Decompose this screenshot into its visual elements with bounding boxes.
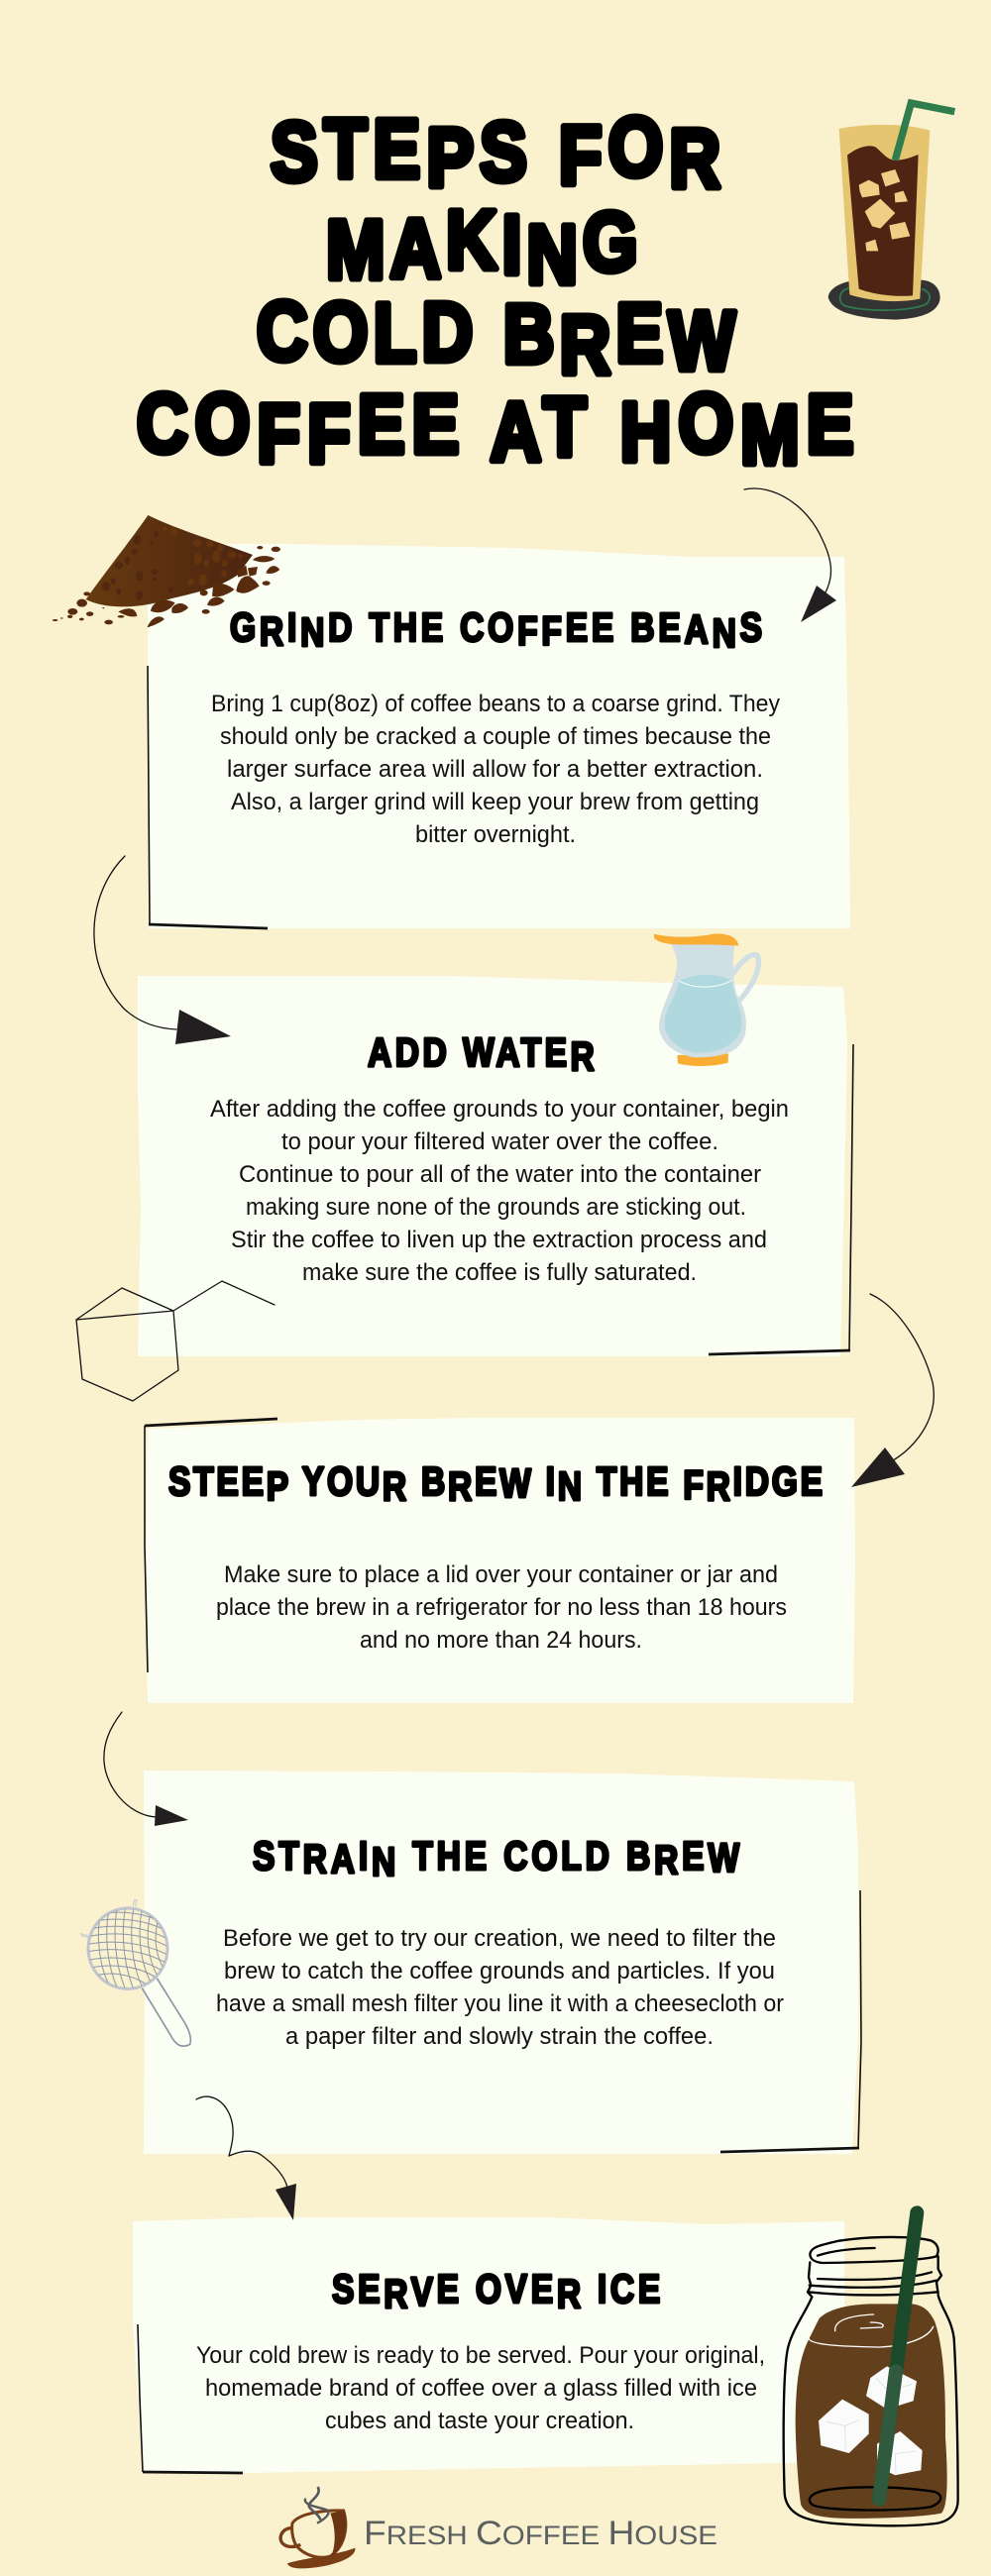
text: step 3 body: and no more than 24 hours. — [360, 1627, 642, 1654]
text: step 4 body: brew to catch the coffee grounds and particles. If you — [224, 1958, 775, 1985]
arrow: step 2 to step 3 — [851, 1294, 934, 1487]
text: step 1 body — [211, 691, 780, 848]
text: step 3 body — [216, 1561, 787, 1654]
panel: step 2 add water — [138, 976, 853, 1356]
title: MAKING — [326, 192, 638, 301]
icon: mason jar of iced coffee — [784, 2212, 958, 2525]
text: step 2 body: Continue to pour all of the water into the container — [239, 1161, 761, 1188]
icon: mesh strainer — [81, 1899, 190, 2046]
text: step 3 body: Make sure to place a lid over your container or jar and — [224, 1561, 778, 1588]
decoration: molecule line drawing — [76, 1281, 275, 1401]
text: step 1 body: larger surface area will allow for a better extraction. — [227, 756, 763, 783]
title: STEPS FOR — [271, 99, 720, 205]
text: step 5 body — [196, 2342, 765, 2434]
text: step 5 body: homemade brand of coffee over a glass filled with ice — [205, 2375, 757, 2402]
text: step 2 body: Stir the coffee to liven up the extraction process and — [231, 1227, 767, 1253]
panel: step 1 grind the coffee beans — [148, 544, 850, 928]
text: step 5 body: Your cold brew is ready to be served. Pour your original, — [196, 2342, 765, 2369]
text: step 1 body: should only be cracked a couple of times because the — [220, 723, 771, 750]
arrow: to step 1 — [744, 488, 836, 622]
arrow: step 3 to step 4 — [104, 1712, 188, 1826]
heading: step 2: ADD WATER — [368, 1029, 595, 1079]
text: logo wordmark: FRESH COFFEE HOUSE — [364, 2515, 717, 2552]
heading: step 3: STEEP YOUR BREW IN THE FRIDGE — [168, 1458, 823, 1509]
text: step 4 body: a paper filter and slowly strain the coffee. — [285, 2023, 714, 2050]
panel: step 4 strain the cold brew — [144, 1771, 861, 2154]
title: COLD BREW — [257, 283, 735, 391]
heading: step 1: GRIND THE COFFEE BEANS — [230, 604, 762, 656]
text: step 1 body: Also, a larger grind will keep your brew from getting — [231, 789, 759, 815]
text: step 1 body: bitter overnight. — [415, 821, 576, 848]
arrow: step 1 to step 2 — [94, 856, 231, 1044]
logo: fresh coffee house — [280, 2487, 717, 2568]
panel: step 5 serve over ice — [133, 2217, 844, 2473]
text: step 2 body: After adding the coffee grounds to your container, begin — [210, 1096, 789, 1123]
icon: coffee grounds pile — [53, 515, 280, 627]
heading: step 4: STRAIN THE COLD BREW — [253, 1833, 740, 1884]
title: COFFEE AT HOME — [137, 376, 853, 482]
arrow: step 4 to step 5 — [196, 2096, 296, 2220]
text: step 2 body: making sure none of the grounds are sticking out. — [246, 1194, 746, 1221]
text: step 2 body: to pour your filtered water over the coffee. — [281, 1128, 718, 1155]
icon: iced coffee glass — [828, 103, 954, 320]
icon: water jug — [654, 933, 758, 1066]
text: step 2 body — [210, 1096, 789, 1286]
text: step 4 body: Before we get to try our creation, we need to filter the — [223, 1925, 776, 1952]
text: step 4 body: have a small mesh filter you line it with a cheesecloth or — [216, 1990, 784, 2017]
title — [137, 99, 853, 482]
text: step 3 body: place the brew in a refrigerator for no less than 18 hours — [216, 1594, 787, 1621]
heading: step 5: SERVE OVER ICE — [332, 2266, 660, 2316]
panel: step 3 steep your brew — [145, 1418, 855, 1703]
text: step 2 body: make sure the coffee is fully saturated. — [302, 1259, 697, 1286]
icon: coffee cup logo — [280, 2487, 355, 2568]
text: step 5 body: cubes and taste your creation. — [325, 2408, 634, 2434]
text: step 4 body — [216, 1925, 784, 2050]
text: step 1 body: Bring 1 cup(8oz) of coffee beans to a coarse grind. They — [211, 691, 780, 717]
